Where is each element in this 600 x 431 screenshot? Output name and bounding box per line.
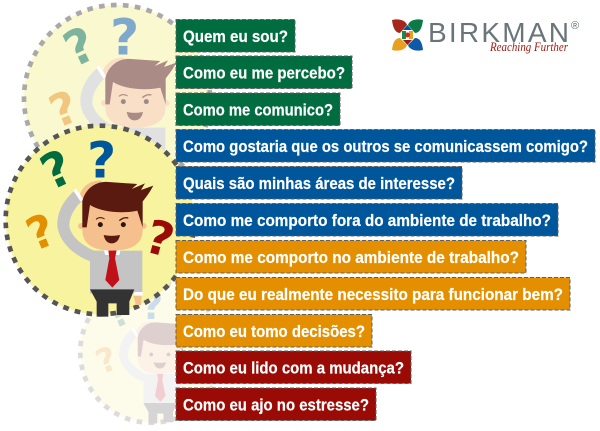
bar: decisões: [176, 314, 372, 347]
bar: estresse: Como eu ajo no estresse?: [183, 396, 369, 414]
bar: Como gostaria: [176, 130, 595, 162]
bottom faded character: [80, 281, 222, 424]
bar: no ambiente: [176, 240, 526, 273]
bar: Quem eu sou: Quem eu sou?: [183, 28, 288, 46]
icon: red question mark: ?: [139, 210, 180, 269]
bar: fora do ambiente: [176, 204, 558, 236]
bottom faded character: ?: [100, 289, 137, 337]
bar: estresse: [176, 388, 376, 420]
icon: orange question mark: ?: [19, 203, 63, 262]
top faded character: [24, 5, 210, 191]
question bars: [176, 20, 595, 420]
dotted circle: [6, 126, 194, 314]
bar: Como eu me percebo: Como eu me percebo?: [183, 64, 345, 82]
logo: Birkman: [392, 17, 579, 54]
top faded character: ?: [110, 8, 139, 66]
man figure: [57, 181, 153, 317]
bar: Quais são minhas áreas: [176, 166, 462, 199]
icon: green question mark: ?: [32, 139, 81, 202]
bar: Como eu me percebo: [176, 56, 352, 88]
top faded character: ?: [55, 16, 104, 79]
bar: mudança: Como eu lido com a mudança?: [183, 360, 404, 378]
logo tagline: Reaching Further: [489, 40, 568, 54]
bar: mudança: [176, 351, 411, 384]
registered mark: ®: [571, 20, 579, 32]
bar: Quem eu sou: [176, 20, 295, 52]
bar: no ambiente: Como me comporto no ambiente de trabalho?: [183, 249, 519, 267]
icon: blue question mark: ?: [87, 131, 116, 189]
bar: Como me comunico: Como me comunico?: [183, 102, 333, 120]
bottom faded character: ?: [141, 284, 163, 328]
bar: Quais são minhas áreas: Quais são minhas áreas de interesse?: [183, 175, 455, 193]
icon: four-colour petals: [392, 19, 423, 51]
bar: necessito: Do que eu realmente necessito para funcionar bem?: [183, 286, 563, 304]
central character with question marks: [6, 126, 194, 317]
bar: necessito: [176, 278, 570, 310]
bar: decisões: Como eu tomo decisões?: [183, 323, 365, 341]
bottom faded character: ?: [90, 339, 123, 382]
bar: fora do ambiente: Como me comporto fora do ambiente de trabalho?: [183, 212, 551, 230]
bar: Como me comunico: [176, 93, 340, 126]
logo wordmark: BIRKMAN: [428, 17, 569, 48]
top faded character: ?: [42, 80, 86, 139]
